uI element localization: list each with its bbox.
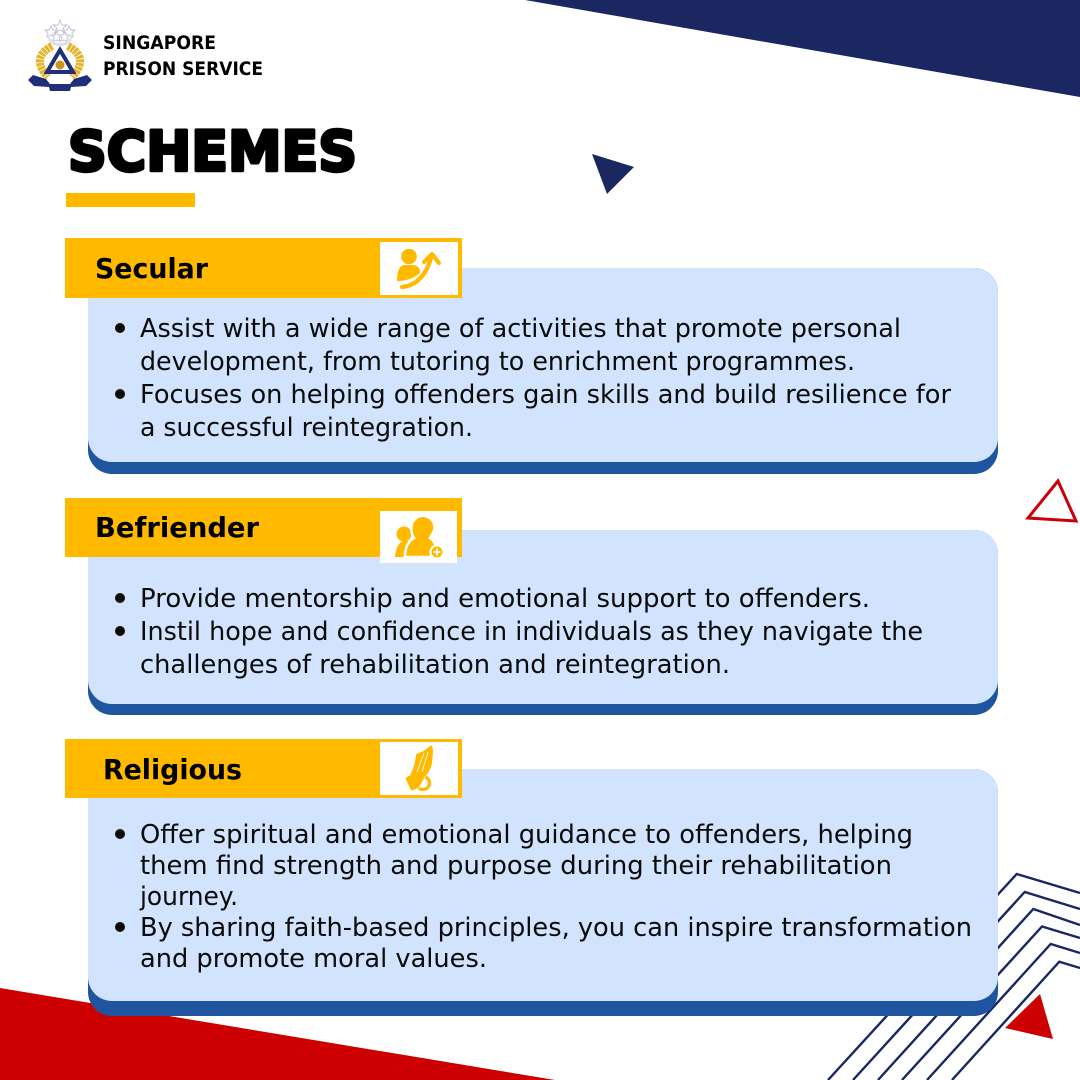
decoration: red bottom-left shape [0,988,555,1080]
decoration: red outlined triangle [1028,481,1076,521]
card background [88,530,998,715]
card background [88,769,998,1016]
icon: two people with plus [395,516,444,558]
decoration: chevron lines [828,874,1080,1080]
text block: By sharing faith-based principles, you can inspire transformation [140,913,972,943]
text block: and promote moral values. [140,944,487,974]
decoration: red triangle [1005,994,1053,1039]
logo text: SINGAPORE [103,32,216,54]
header bar [65,498,462,563]
logo text: PRISON SERVICE [103,58,263,80]
panel: secular [65,238,998,474]
text block: journey. [139,882,238,912]
text block: Assist with a wide range of activities that promote personal [140,314,901,344]
logo: prison service crest [28,20,92,91]
icon: person with upward arrow [397,249,439,287]
decoration: navy corner shape [525,0,1080,97]
header bar: Secular [95,252,208,285]
title: SCHEMES [68,120,357,184]
text block: Focuses on helping offenders gain skills and build resilience for [140,380,952,410]
header bar: Religious [103,753,242,786]
header bar [65,238,462,298]
logo text [103,32,263,80]
text block: a successful reintegration. [140,413,473,443]
header bar [65,739,462,798]
decoration: navy triangle [592,154,634,194]
text block: Instil hope and confidence in individuals as they navigate the [140,617,923,647]
text block: Offer spiritual and emotional guidance to offenders, helping [140,820,913,850]
text block [115,820,972,974]
icon: praying hands [405,745,433,791]
text block [115,314,952,443]
text block: Provide mentorship and emotional support to offenders. [140,584,870,614]
header bar: Befriender [95,511,259,544]
text block [115,584,923,680]
panel: befriender [65,498,998,715]
text block: challenges of rehabilitation and reintegration. [140,650,730,680]
card background [88,268,998,474]
text block: them find strength and purpose during their rehabilitation [140,851,892,881]
panel: religious [65,739,998,1016]
text block: development, from tutoring to enrichment programmes. [140,347,855,377]
title underline [66,193,195,207]
